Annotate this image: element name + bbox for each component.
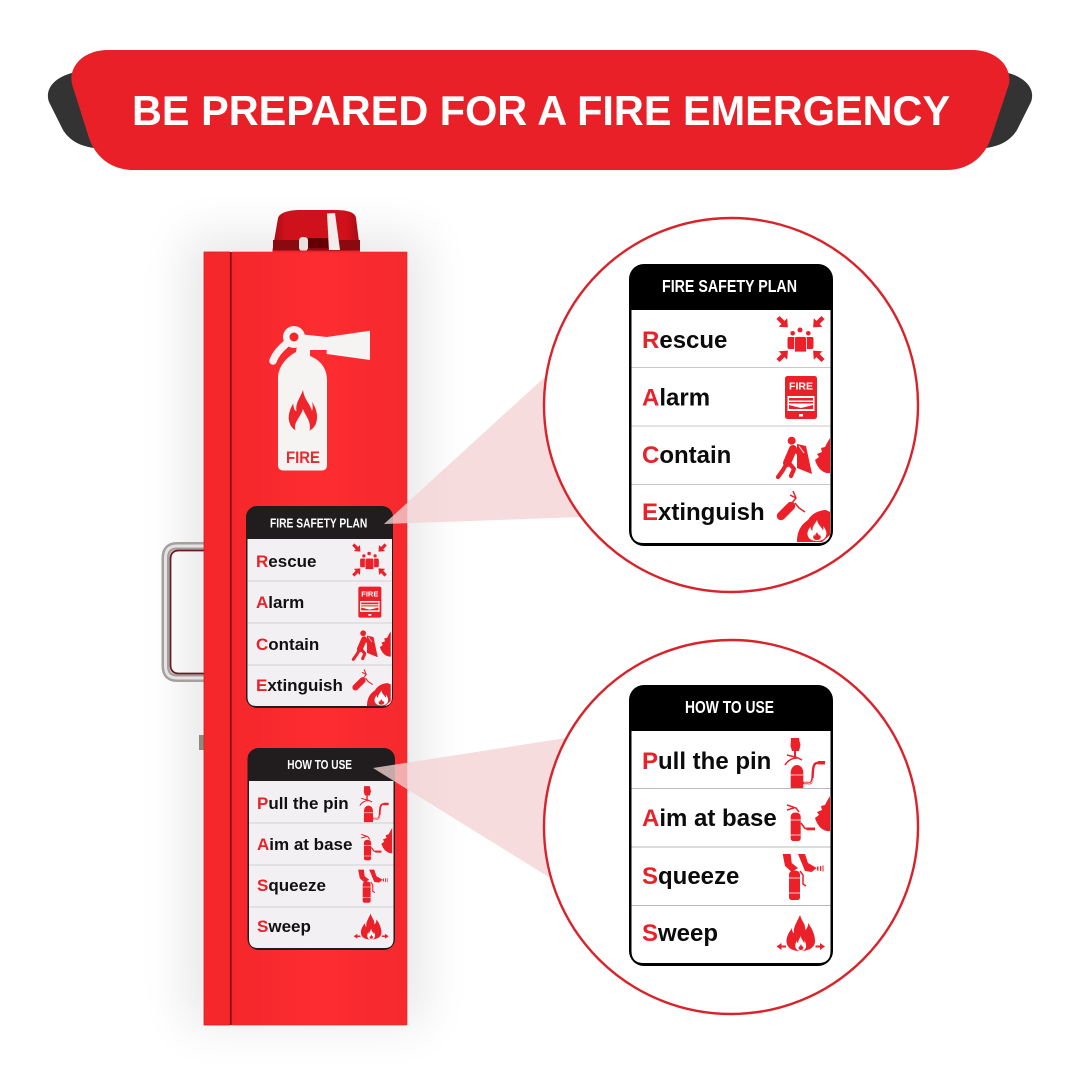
icon: aim	[361, 828, 392, 860]
small card: fire safety plan	[246, 506, 393, 708]
banner right fold	[986, 72, 1032, 148]
extinguisher inner flame	[295, 409, 310, 432]
icon: aim	[787, 796, 830, 841]
warning beacon	[272, 210, 360, 252]
pull row: Pull the pin	[257, 794, 349, 813]
small card: how to use	[248, 748, 395, 950]
extinguisher label: FIRE	[286, 448, 320, 467]
cabinet soft shadow	[185, 235, 425, 1025]
contain row: Contain	[642, 442, 731, 469]
banner: red ribbon	[48, 50, 1032, 170]
icon: rescue	[350, 541, 389, 579]
squeeze row: Squeeze	[642, 863, 739, 890]
icon: extinguish	[355, 669, 391, 706]
alarm row: Alarm	[256, 593, 304, 612]
sweep row: Sweep	[642, 920, 718, 947]
large card header: HOW TO USE	[685, 697, 774, 717]
large card: fire safety plan	[629, 264, 833, 546]
extinguish row: Extinguish	[642, 499, 765, 526]
small card header: FIRE SAFETY PLAN	[270, 517, 367, 531]
icon: alarm	[785, 376, 817, 419]
contain row: Contain	[256, 635, 319, 654]
cabinet door gap	[230, 252, 232, 1025]
callout beam: how to use	[373, 738, 566, 879]
large card header: FIRE SAFETY PLAN	[662, 276, 797, 296]
large card: how to use	[629, 685, 833, 966]
icon: squeeze	[783, 854, 824, 900]
icon: squeeze	[358, 870, 388, 903]
cabinet product	[166, 210, 407, 1025]
handle	[166, 546, 204, 678]
rescue row: Rescue	[256, 552, 316, 571]
rescue row: Rescue	[642, 327, 727, 354]
cabinet front panel	[232, 252, 407, 1025]
sweep row: Sweep	[257, 917, 311, 936]
callout circle: fire safety plan	[544, 218, 918, 592]
small card header: HOW TO USE	[287, 758, 352, 772]
extinguisher flame	[289, 390, 317, 432]
aim row: Aim at base	[642, 805, 777, 832]
icon: sweep	[354, 914, 389, 940]
icon: rescue	[774, 313, 827, 365]
icon: pull	[360, 786, 389, 822]
cabinet side strip	[204, 252, 230, 1025]
icon: extinguish	[781, 491, 830, 542]
aim row: Aim at base	[257, 835, 352, 854]
icon: contain	[778, 437, 830, 477]
icon: alarm	[358, 587, 381, 618]
banner left fold	[48, 72, 94, 148]
title: BE PREPARED FOR A FIRE EMERGENCY	[132, 87, 950, 134]
side bolt	[199, 735, 204, 750]
icon: fire extinguisher	[273, 326, 370, 470]
pull row: Pull the pin	[642, 748, 771, 775]
callout beam: fire safety plan	[384, 376, 582, 524]
alarm row: Alarm	[642, 384, 710, 412]
callout circle: how to use	[544, 640, 918, 1014]
extinguish row: Extinguish	[256, 676, 343, 695]
banner shape	[71, 50, 1009, 170]
icon: sweep	[776, 915, 825, 951]
squeeze row: Squeeze	[257, 876, 326, 895]
icon: contain	[353, 630, 391, 659]
icon: pull	[785, 738, 825, 788]
